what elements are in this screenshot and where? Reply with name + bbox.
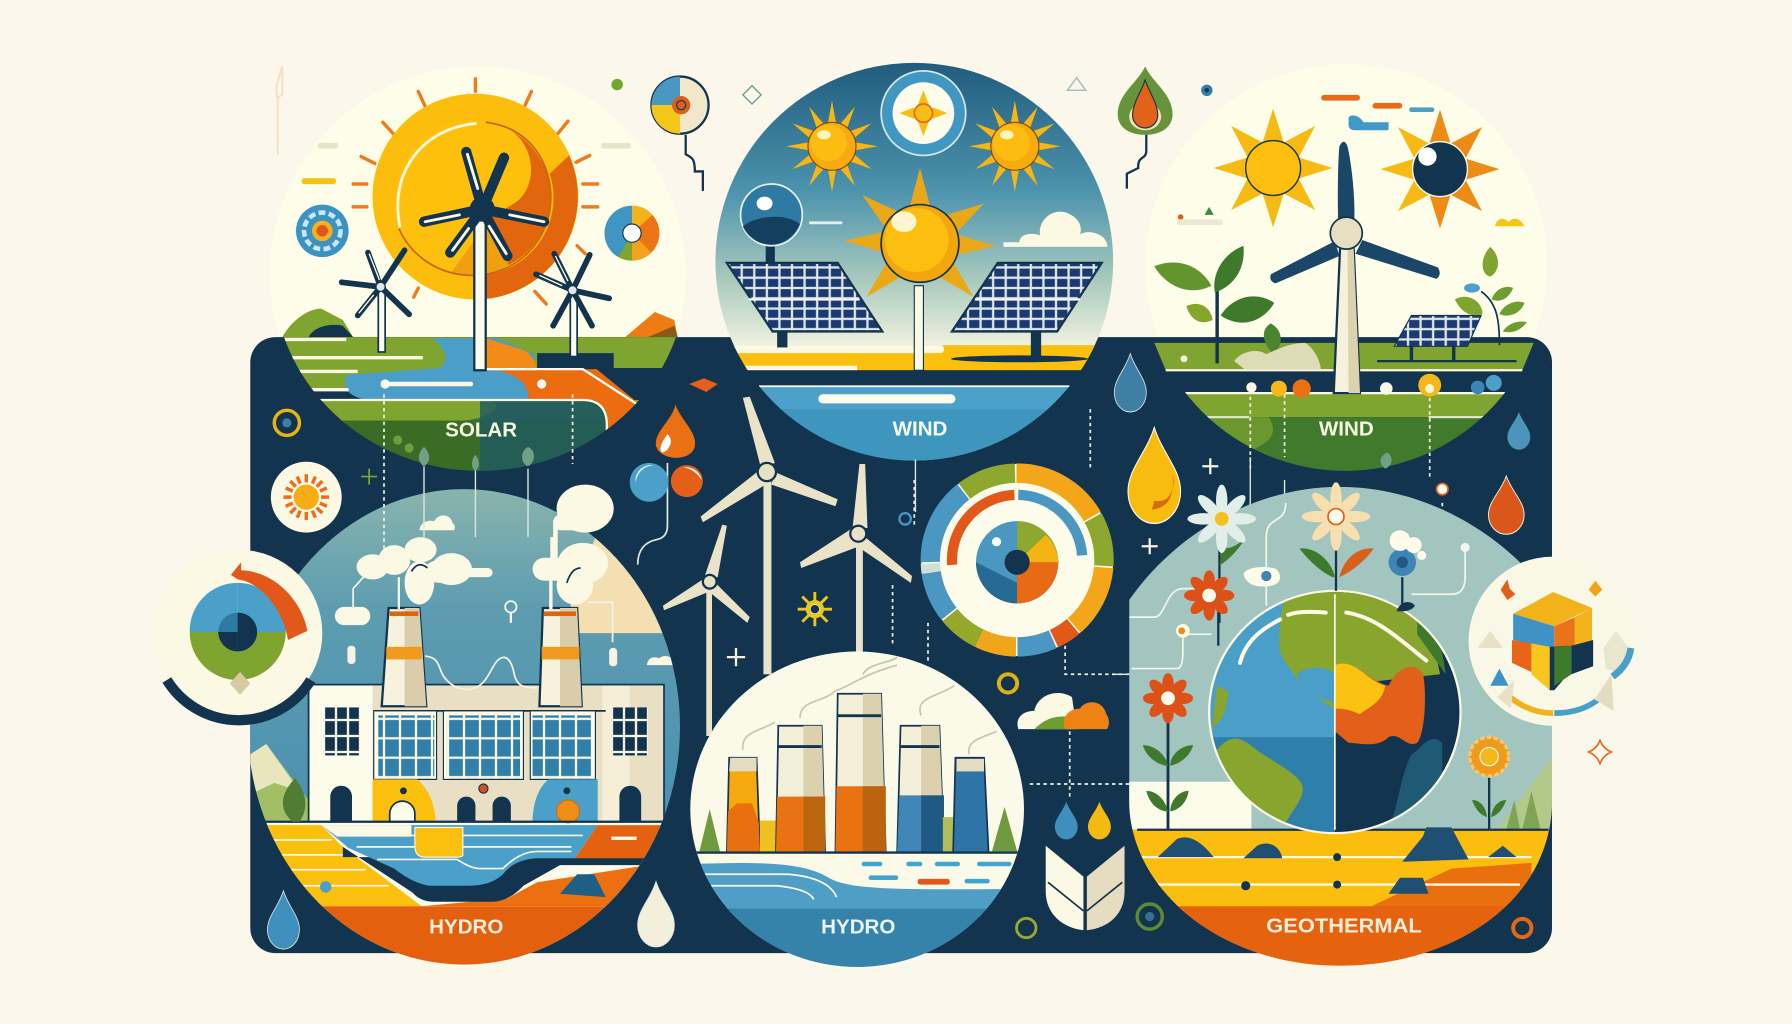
cloud bbox=[1003, 212, 1107, 247]
globe bbox=[1208, 590, 1462, 834]
plant left bbox=[1154, 246, 1274, 363]
big turbine bbox=[1270, 142, 1440, 393]
piping bbox=[425, 656, 537, 689]
panel: wind center bbox=[709, 57, 1120, 466]
ground bbox=[266, 822, 662, 954]
bowl bbox=[1185, 392, 1506, 471]
hills bbox=[282, 309, 353, 337]
icon: balloon gauge bbox=[651, 77, 709, 191]
solar panel left bbox=[727, 263, 882, 347]
icon: yellow ring bbox=[274, 410, 299, 435]
chimneys bbox=[382, 608, 426, 706]
solar panel right bbox=[951, 263, 1102, 362]
label: wind: WIND bbox=[893, 417, 947, 440]
label: solar: SOLAR bbox=[445, 419, 517, 442]
sky bbox=[246, 486, 691, 826]
label: geothermal: GEOTHERMAL bbox=[1266, 915, 1422, 938]
icon: sun badge bbox=[881, 71, 966, 155]
chimneys bbox=[727, 758, 760, 853]
pole bbox=[914, 286, 923, 370]
halo circles bbox=[270, 64, 1547, 482]
label: hydro 2: HYDRO bbox=[821, 916, 895, 939]
land bbox=[284, 337, 676, 471]
ground bbox=[1126, 830, 1560, 967]
small turbine right bbox=[536, 254, 609, 357]
sky bbox=[709, 57, 1120, 354]
flower: center bbox=[1299, 482, 1374, 591]
label: wind 2: WIND bbox=[1319, 417, 1374, 440]
clouds bbox=[335, 515, 675, 665]
icon: water drops bbox=[1114, 354, 1146, 412]
dashes bbox=[1321, 95, 1434, 130]
sun bbox=[373, 94, 578, 299]
flower: sunflower right bbox=[1470, 737, 1509, 830]
mini solar panel bbox=[1377, 315, 1517, 361]
water bbox=[759, 386, 1070, 461]
sun rays bbox=[353, 79, 598, 304]
icon: gauge wheel bbox=[921, 464, 1113, 656]
icon: yellow ring bbox=[999, 674, 1017, 693]
icon: drops pair bbox=[1055, 802, 1111, 839]
panel: geothermal bbox=[1126, 480, 1560, 969]
center turbines bbox=[701, 397, 838, 674]
icon: color wheel bbox=[605, 206, 659, 261]
big white cloud bbox=[553, 485, 614, 575]
icon: leaf drop bbox=[1118, 66, 1173, 189]
panel: solar bbox=[276, 66, 678, 471]
cloud icon bbox=[1017, 693, 1109, 729]
dark main panel bbox=[250, 337, 1552, 953]
building bbox=[309, 685, 664, 822]
right sun bbox=[952, 84, 1077, 209]
icon: pie chart with arc bbox=[155, 550, 322, 720]
smoke bbox=[743, 657, 997, 754]
ground bbox=[1154, 343, 1534, 370]
small turbine left bbox=[342, 250, 409, 352]
small clouds bbox=[302, 178, 336, 184]
flower: blue bbox=[1389, 530, 1426, 611]
center sun bbox=[844, 168, 996, 304]
panel: hydro left bbox=[246, 485, 691, 975]
drops and balloon cluster bbox=[630, 378, 718, 502]
icon: small sun bbox=[798, 592, 832, 626]
hill bbox=[250, 744, 309, 825]
icon: cube badge bbox=[1469, 557, 1638, 726]
connectors bbox=[1129, 503, 1465, 669]
trees bbox=[699, 809, 720, 851]
ground bbox=[734, 345, 1095, 370]
blue ball bbox=[741, 184, 802, 265]
stems with leaves bbox=[419, 447, 1392, 471]
tree bbox=[283, 778, 305, 822]
icon: star outline bbox=[1589, 741, 1611, 763]
icon: sun badge bbox=[271, 462, 342, 533]
small dots row bbox=[1246, 374, 1502, 398]
small top icons bbox=[611, 78, 1223, 225]
flower: white bbox=[1187, 485, 1256, 623]
panel: hydro center bbox=[686, 646, 1029, 977]
big turbine bbox=[424, 152, 544, 370]
node bbox=[1176, 483, 1448, 638]
icon: plus marks bbox=[361, 469, 377, 485]
decorative faint outline bbox=[277, 66, 282, 154]
flower: orange left bbox=[1143, 673, 1193, 830]
panel: wind right bbox=[1143, 95, 1554, 486]
icon: leaf emblem bbox=[1046, 846, 1125, 930]
left sun bbox=[770, 84, 894, 209]
flower: red bbox=[1184, 570, 1234, 646]
icon: blue sun badge bbox=[296, 205, 349, 257]
hill bbox=[1497, 758, 1552, 830]
icon: rings bbox=[899, 513, 1531, 938]
plant right bbox=[1455, 247, 1527, 345]
label: hydro: HYDRO bbox=[429, 916, 503, 939]
suns bbox=[1214, 109, 1333, 227]
dashed connectors bbox=[384, 383, 1442, 800]
